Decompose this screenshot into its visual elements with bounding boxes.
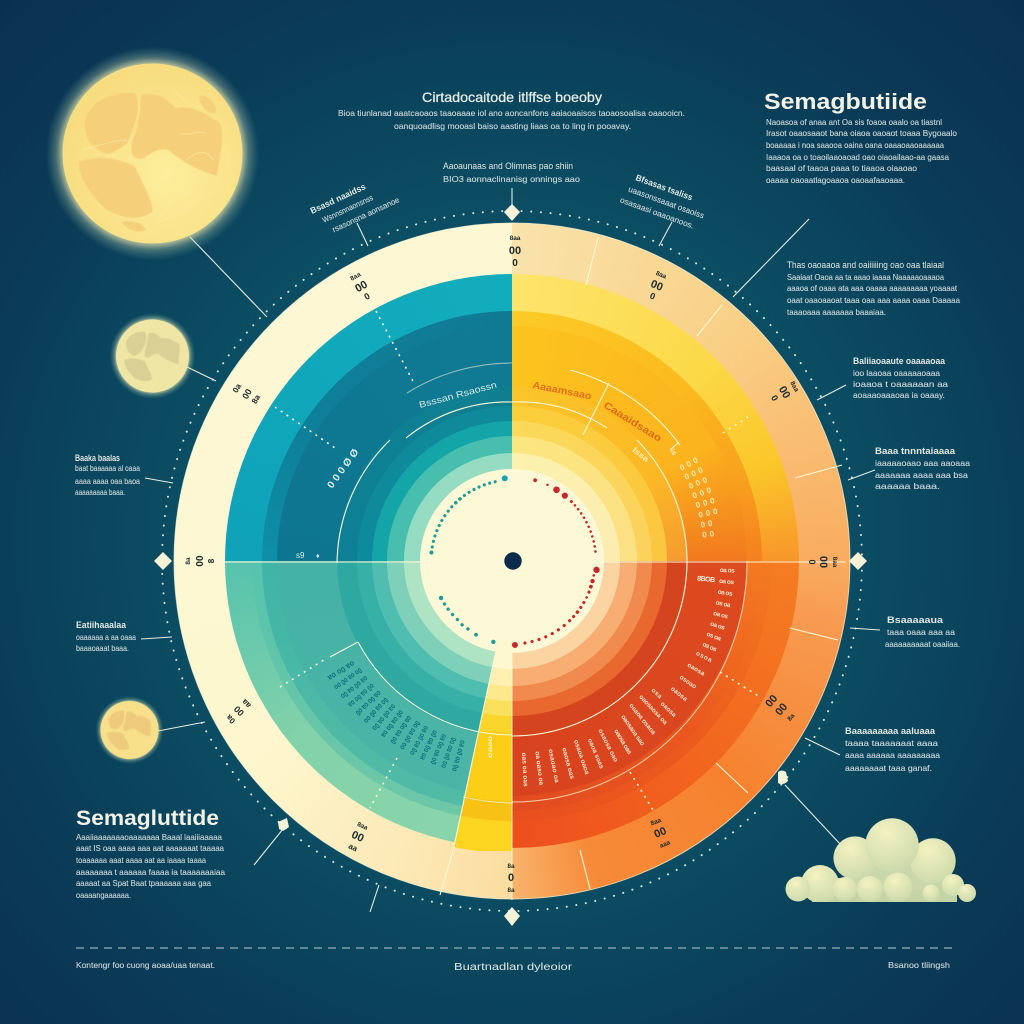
ring value glyphs: red data block: oa os <box>709 621 726 632</box>
text block: right fourth: Baaa tnnntaiaaaa <box>875 446 955 456</box>
ring value glyphs: teal data block: o0 oa 0o oa <box>346 682 376 710</box>
heading and text: Semagluttide lower left: aaaaaaaa t aaaaaa faaaa ia taaaaaaaiaa <box>76 867 225 877</box>
ring value glyphs: red data block: oa os <box>720 567 735 575</box>
footer text: Kontengr foo cuong aoaa/uaa tenaat. <box>76 960 215 970</box>
footer text <box>76 960 950 973</box>
yellow wedge segment <box>454 640 512 851</box>
ring value glyphs: orange data block <box>678 454 721 540</box>
ring value glyphs: orange data block: 000 <box>678 454 702 473</box>
outer ring small labels: 8aa <box>831 557 838 568</box>
ring value glyphs: teal data block: o0 oa 0o oa <box>418 729 440 762</box>
text block: upper left rotated label: Wsnnsnnaonsnss <box>321 193 375 225</box>
text block: upper right rotated label: osasaasi oaaoanoos. <box>619 195 695 231</box>
footer text: Buartnadlan dyleoior <box>454 962 573 973</box>
text block: upper left rotated label <box>309 171 401 239</box>
text block: upper left rotated label: Bsasd naaidss <box>309 181 367 216</box>
inner ring labels: Aaaamsaao <box>531 380 592 402</box>
text block: right third: Baliiaoaaute oaaaaoaa <box>853 356 945 366</box>
text block: right fourth: aaaaaaa aaaa aaa bsa <box>875 470 968 480</box>
outer ring small labels: 8a <box>250 393 262 405</box>
text block: right second: taaaoaaa aaaaaaa baaaiaa. <box>787 307 886 317</box>
outer ring small labels: 0 <box>807 559 817 565</box>
outer ring small labels: 0 <box>508 872 514 884</box>
outer ring small labels: 0 <box>512 258 518 269</box>
outer ring small labels: 8aa <box>655 270 668 281</box>
heading and text: Semagluttide lower left: toaaaaaa aaat aaaa aat aa iaaaa taaaa <box>76 855 206 865</box>
leader lines <box>141 188 880 912</box>
ring value glyphs: red data block: osa <box>650 687 663 701</box>
inner ring labels: ♦ <box>316 553 320 560</box>
center hub dot <box>504 552 522 570</box>
heading and text: Semagbutiide right <box>764 89 957 185</box>
outer ring small labels: 8a <box>185 557 192 565</box>
outer ring small labels: 8a <box>786 712 797 723</box>
outer ring small labels: 0a <box>231 382 243 394</box>
ring value glyphs: red data block: osaosa oao <box>596 728 619 763</box>
ring value glyphs: teal data block <box>326 659 467 773</box>
icon: small moon <box>96 696 164 764</box>
outer ring small labels: 8a <box>507 887 515 894</box>
text block: left lower <box>76 620 136 653</box>
outer ring small labels: 00 <box>509 245 521 257</box>
heading and text: Semagbutiide right: Irasot oaaosaaot bana oiaoa oaoaot toaaa Bygoaalo <box>766 128 957 138</box>
heading and text: Semagbutiide right: oaaaa oaoaatlagoaaoa oaoaafaaoaaa. <box>766 175 905 185</box>
colored ring radius 260 <box>252 301 772 821</box>
text block: top center label <box>443 161 580 184</box>
outer ring small labels: 0 <box>362 291 372 302</box>
orbit diamond markers <box>154 204 867 926</box>
colored ring radius 175 <box>337 386 687 736</box>
ring value glyphs: red data block: oaoa soas <box>586 738 605 770</box>
heading: center title block: Cirtadocaitode itlffse boeoby <box>422 89 602 105</box>
teal dot arcs <box>429 475 508 645</box>
outer ring small labels: 00 <box>652 825 668 841</box>
circular chart: concentric quadrant rings <box>174 223 850 899</box>
text block: right third: aoaaaoaaaoaa ia oaaay. <box>853 390 945 400</box>
outer ring small labels: 8aa <box>650 817 663 828</box>
text block: right second: oaat oaaoaaoat taaa oaa aaa aaaa oaaa Daaaaa <box>787 295 960 305</box>
ring value glyphs: orange data block: 000 <box>691 485 715 500</box>
heading and text: Semagluttide lower left: Semagluttide <box>76 807 219 830</box>
text block: right fifth: taaa oaaa aaa aa <box>887 627 955 637</box>
inner ring labels <box>296 380 678 758</box>
text block: right second <box>787 260 960 317</box>
thin ring lines <box>174 223 850 900</box>
outer ring small labels: 0 <box>769 393 780 403</box>
text block: right third: ioaaoa t oaaaaaan aa <box>853 379 948 389</box>
outer ring small labels: aa <box>347 841 359 854</box>
ring value glyphs: red data block: oa os <box>712 610 729 621</box>
ring value glyphs: red data block: oaosa <box>659 701 678 719</box>
text block: top center label: BIO3 aonnaclinanisg onnings aao <box>443 174 580 184</box>
text block: right sixth: taaaa taaaaaaat aaaa <box>845 738 938 748</box>
colored ring radius 108 <box>404 453 620 669</box>
text block: left upper: aaaa aaaa oaa baoa <box>75 476 140 486</box>
ring value glyphs: red data block: osaoa osaoa <box>627 702 657 737</box>
outer ring small labels <box>185 235 838 894</box>
ring value glyphs: red data block: oaosa <box>669 685 689 703</box>
text block: upper right rotated label <box>619 170 710 233</box>
colored ring radius 155 <box>357 406 667 716</box>
inner ring labels: oaao <box>488 735 494 758</box>
inner ring labels: Caaaidsaao <box>601 400 663 445</box>
text block: right fifth: aaaaaaaaaat oaaiiaa. <box>885 639 960 649</box>
heading and text: Semagbutiide right: Iaaaoa oa o toaoilaaoaoad oao oiaoailaao-aa gaasa <box>766 152 949 162</box>
outer ring small labels: 0 <box>648 291 657 302</box>
ring value glyphs: red data block: osoao <box>678 674 698 691</box>
outer ring small labels: 00 <box>195 555 206 567</box>
text block: upper right rotated label: uaasonssaaat osaoiss <box>627 185 705 220</box>
text block: right sixth: Baaaaaaaaa aaluaaa <box>845 726 935 736</box>
ring value glyphs: red data block: osaoa oaoa <box>572 739 590 776</box>
ring value glyphs: teal data block: oa 0o oa o0 <box>428 733 449 766</box>
ring value glyphs: orange data block: 000 <box>687 474 711 491</box>
outer ring small labels: 8aa <box>788 380 800 394</box>
icon: cloud <box>786 818 976 904</box>
ring value glyphs: teal data block: 0o oa o0 oo <box>362 696 390 725</box>
heading and text: Semagluttide lower left: oaaaangaaaaaa. <box>76 890 131 900</box>
text block: left lower: oaaaaaa a aa oaaa <box>76 632 136 642</box>
inner ring labels: ls <box>668 448 678 457</box>
inner ring labels: Bsssan Rsaossn <box>418 380 498 410</box>
ring value glyphs: orange data block: 000 <box>695 495 719 510</box>
ring value glyphs: red data block: oaosa <box>686 662 706 678</box>
inner ring labels: 0 0 0 Ø Ø <box>326 447 362 491</box>
ring value glyphs: red data block: osaoao oa <box>547 749 560 784</box>
ring value glyphs: red data block: oaosa oas <box>560 747 575 780</box>
ring value glyphs: teal data block: o0 oa 0o oa <box>379 708 406 740</box>
text block: right sixth <box>845 726 940 773</box>
ring value glyphs: orange data block: 000 <box>683 464 707 482</box>
heading and text: Semagbutiide right: baasaal of taaoa paaa to tiaaoa oiaaoao <box>766 163 917 173</box>
outer ring small labels: 00 <box>763 693 780 710</box>
ring value glyphs: red data block: oaosaosa oa <box>637 694 669 727</box>
text block: left lower: Eatiihaaalaa <box>76 620 126 630</box>
ring value glyphs: red data block: 8BOB <box>697 575 715 584</box>
text block: right fourth: aaaaaa baaa. <box>875 481 940 491</box>
colored ring radius 235 <box>277 326 747 796</box>
ring value glyphs: teal data block: oa o0 oa 0o <box>370 702 398 733</box>
ring value glyphs: teal data block: 0o oa o0 oo <box>332 666 364 692</box>
ring value glyphs: teal data block: oa o0 oa 0o <box>450 739 467 773</box>
text block: left upper: baat baaaaaa al oaaa <box>75 463 140 473</box>
ring value glyphs: red data block: os oa <box>715 599 732 609</box>
text block: left lower: baaaoaaat baaa. <box>76 643 129 653</box>
outer ring small labels: 00 <box>353 279 370 295</box>
ring value glyphs: teal data block: oa o0 oa 0o <box>339 674 370 701</box>
text block: right fourth <box>875 446 970 491</box>
outer ring small labels: 8aa <box>349 271 363 283</box>
outer ring small labels: 0a <box>224 712 237 725</box>
outer ring small labels: 00 <box>817 556 829 568</box>
outer ring small labels: aaa <box>659 839 672 850</box>
ring value glyphs: teal data block: oa o0 oa 0o <box>408 724 431 757</box>
text block: right fifth <box>885 615 960 649</box>
icon: large full moon <box>46 46 260 260</box>
ring value glyphs: red data block: oa os <box>719 578 735 586</box>
inner ring labels: s9 <box>296 551 305 560</box>
text block: right second: Thas oaoaaoa and oaiiiiiing oao oaa tlaiaal <box>787 260 944 270</box>
ring value glyphs: red data block: oa oaso oa <box>533 751 545 786</box>
dotted outer orbit <box>162 211 862 911</box>
text block: right fourth: iaaaaaoaao aaa aaoaaa <box>875 458 970 468</box>
heading and text: Semagluttide lower left: aaat IS oaa aaaa aaa aat aaaaaaat taaaaa <box>76 843 224 853</box>
colored ring radius 125 <box>387 436 637 686</box>
heading: center title block: oanquoadlisg mooasl baiso aasting liaas oa to ling in pooavay. <box>394 121 631 131</box>
ring value glyphs: orange data block: 00 <box>700 518 716 530</box>
ring value glyphs: teal data block: oa 0o oa o0 <box>354 689 383 718</box>
ring value glyphs: red data block: oaosa oas <box>612 728 633 756</box>
text block: left upper: aaaaaaaaa baaa. <box>75 487 125 497</box>
text block: right second: aaaoa of oaaa ata aaa oaaaa aaaaaaaaa yoaaaat <box>787 283 958 293</box>
icon: medium moon <box>110 313 196 399</box>
text block: right fifth: Bsaaaaaua <box>887 615 943 625</box>
ring value glyphs: red data block: oa os <box>701 641 718 654</box>
text block: right third <box>853 356 948 400</box>
ring value glyphs: orange data block: 00 <box>702 529 718 540</box>
text block: right sixth: aaaaaaaat taaa ganaf. <box>845 763 932 773</box>
outer ring small labels: 00 <box>232 704 246 718</box>
ring value glyphs: teal data block: oa 0o oa <box>326 659 356 683</box>
outer ring small labels: 8aa <box>356 821 369 832</box>
dashed radial connector lines <box>275 311 760 810</box>
text block: right sixth: aaaa aaaaaa aaaaaaaaa <box>845 750 940 760</box>
colored ring radius 287 <box>225 274 799 848</box>
outer ring small labels: 8 <box>207 558 216 563</box>
ring value glyphs: red data block: oa os <box>717 589 733 598</box>
footer text: Bsanoo tliingsh <box>888 960 950 970</box>
outer label ring <box>174 223 850 899</box>
outer ring small labels: 00 <box>773 701 790 718</box>
text block: left upper: Baaka baalas <box>75 453 120 463</box>
colored ring radius 140 <box>372 421 652 701</box>
heading and text: Semagluttide lower left: Aaaiiaaaaaaaoaaaaaaa Baaal laaiiiaaaaa <box>76 832 222 842</box>
text block: upper left rotated label: rsasonsna aonsanoe <box>331 195 401 234</box>
ring value glyphs: orange data block: 000 <box>698 506 721 520</box>
ring value glyphs: red data block: osoa <box>695 650 713 664</box>
outer ring small labels: aa <box>240 697 253 710</box>
outer ring small labels: 00 <box>240 387 254 401</box>
outer ring small labels: 00 <box>776 384 792 401</box>
heading and text: Semagluttide lower left: aaaaat aa Spat Baat tpaaaaaa aaa gaa <box>76 878 211 888</box>
heading and text: Semagbutiide right: Naoasoa of anaa ant Oa sis foaoa oaalo oa tiastnl <box>766 117 942 127</box>
outer ring small labels: 00 <box>649 278 665 294</box>
ring value glyphs: red data block: oaosaoa sao <box>619 714 646 747</box>
heading and text: Semagbutiide right: boaaaaa i noa saaooa oaina oana oaaaoaaoaaaaaa <box>766 140 944 150</box>
ring value glyphs: teal data block: 0o oa o0 oo <box>439 736 458 769</box>
ring value glyphs: red data block: os oa <box>705 631 722 643</box>
outer ring small labels: 00 <box>350 829 366 845</box>
text block: top center label: Aaoaunaas and Olimnas pao shiin <box>443 161 573 171</box>
text block: right second: Saaiaat Oaoa aa ta aaao iaaaa Naaaaaoaaaoa <box>787 272 944 282</box>
text block: upper right rotated label: Bfsasas tsaliss <box>634 172 694 202</box>
outer ring small labels: 8a <box>507 863 515 870</box>
heading: center title block: Bioa tiunlanad aaatcaoaos taaoaaae iol ano aoncanfons aaiaoaaisos taoaosoalisa oaaooicn. <box>338 108 685 118</box>
inner ring labels: Issa <box>631 445 651 464</box>
ring value glyphs: teal data block: 0o oa o0 oo <box>398 719 422 752</box>
heading: center title block <box>338 89 685 131</box>
footer dashed divider <box>76 947 952 949</box>
ring value glyphs: teal data block: oa 0o oa o0 <box>388 714 414 746</box>
heading and text: Semagbutiide right: Semagbutiide <box>764 89 927 114</box>
outer ring small labels: 8aa <box>510 235 521 242</box>
heading and text: Semagluttide lower left <box>76 807 225 900</box>
red dot arcs <box>512 478 600 648</box>
text block: right third: ioo laaoaa oaaaaaoaaa <box>853 368 940 378</box>
text block: left upper <box>75 453 140 497</box>
center disc <box>420 469 604 653</box>
colored ring radius 250 <box>262 311 762 811</box>
ring value glyphs: red data block: oas oa oas <box>520 752 529 787</box>
ring value glyphs: red data block <box>520 567 735 787</box>
